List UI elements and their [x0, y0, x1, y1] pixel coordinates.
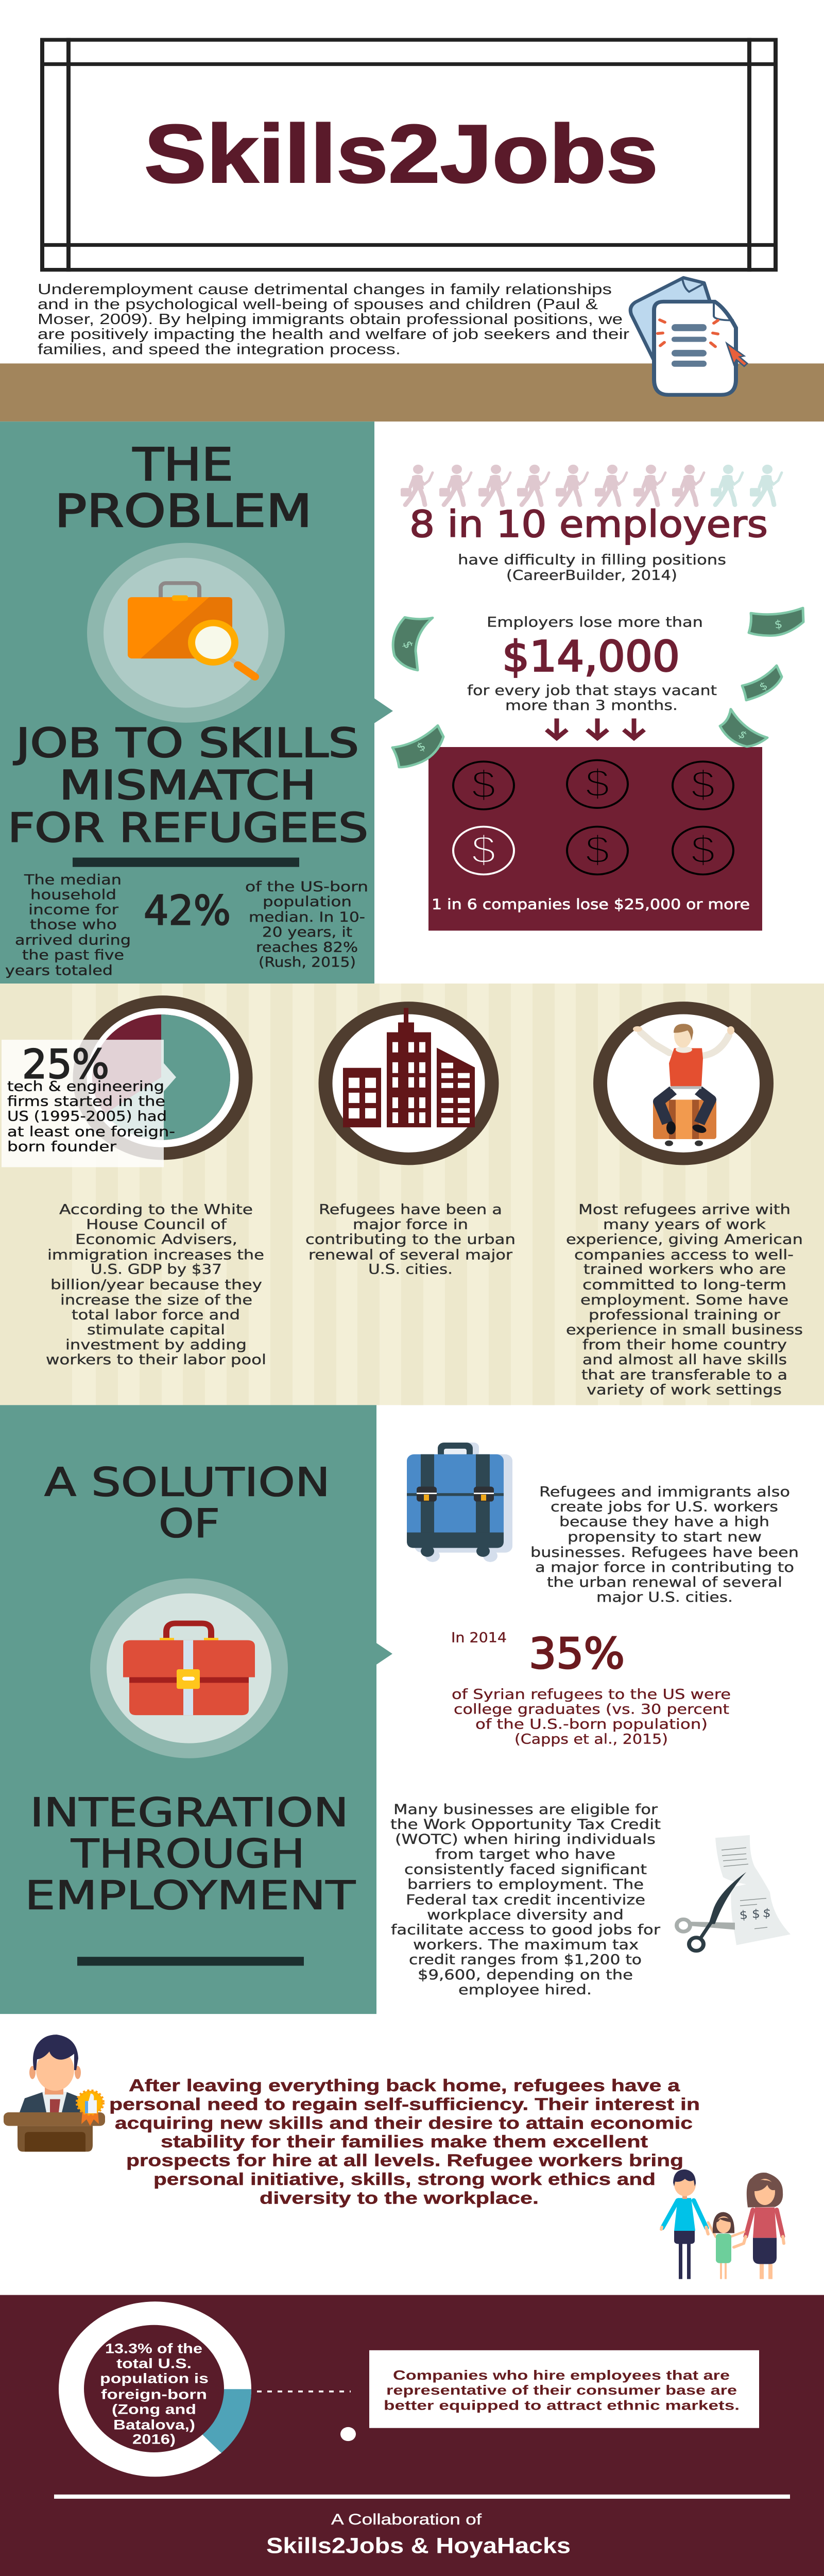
text: work opportunity tax credit: from target who have — [435, 1846, 615, 1862]
callout: ethnic markets: representative of their consumer base are — [386, 2383, 737, 2398]
text: a collaboration of: A Collaboration of — [331, 2510, 482, 2528]
text: syrian refugees — [452, 1686, 731, 1747]
text: self-sufficiency message: stability for their families make them excellent — [161, 2132, 648, 2151]
text: difficulty filling positions — [458, 552, 726, 583]
text: median income right — [245, 878, 368, 970]
callout: ethnic markets — [369, 2350, 759, 2428]
heading: the problem: THE — [132, 438, 233, 491]
heading: job to skills mismatch: JOB TO SKILLS — [13, 721, 359, 767]
icon: flying money bills — [392, 608, 803, 767]
dollar signs: $ — [586, 761, 609, 805]
text: white house council: total labor force and — [72, 1307, 240, 1323]
chart: 25% pie — [80, 1002, 246, 1154]
icon: dollar coins — [453, 760, 733, 874]
text: median income left: the past five — [22, 947, 124, 963]
text: create jobs: create jobs for U.S. workers — [551, 1499, 778, 1515]
divider bar — [77, 1957, 304, 1965]
text: foreign-born stat — [100, 2341, 209, 2447]
icon: man at podium with award badge — [4, 2035, 105, 2151]
receipt dollar signs: $ — [762, 1906, 771, 1920]
text: refugee experience: trained workers who are — [583, 1261, 786, 1277]
text: urban renewal: U.S. cities. — [368, 1261, 453, 1277]
text: work opportunity tax credit: facilitate access to good jobs for — [391, 1922, 661, 1938]
icon: three down arrows — [546, 719, 644, 738]
icon: blue suitcase — [407, 1443, 512, 1562]
stat: $14,000: $14,000 — [502, 633, 680, 682]
text: white house council: increase the size of the — [60, 1292, 252, 1308]
text: syrian refugees: of the U.S.-born population) — [475, 1716, 708, 1732]
text: self-sufficiency message: diversity to the workplace. — [260, 2189, 539, 2208]
intro text — [38, 281, 629, 358]
panel: 1 in 6 companies — [428, 747, 762, 930]
text: in 2014: In 2014 — [451, 1630, 507, 1646]
text: refugee experience: and almost all have skills — [582, 1351, 787, 1368]
text: create jobs — [530, 1484, 799, 1605]
text: white house council: Economic Advisers, — [75, 1231, 237, 1247]
text: create jobs: Refugees and immigrants also — [539, 1484, 790, 1500]
panel: a solution — [0, 1405, 392, 2014]
text: median income right: (Rush, 2015) — [259, 954, 356, 970]
heading: integration through employment: THROUGH — [71, 1831, 305, 1877]
text: white house council: billion/year because they — [50, 1277, 262, 1293]
text: create jobs: because they have a high — [559, 1514, 769, 1530]
icon: documents with cursor — [630, 278, 747, 395]
heading: job to skills mismatch — [8, 721, 368, 852]
text: foreign-born stat: total U.S. — [116, 2356, 192, 2371]
footer divider — [54, 2495, 790, 2499]
dotted connector — [257, 2391, 351, 2393]
text: every vacant job — [467, 682, 717, 714]
text: median income left: income for — [28, 902, 119, 918]
text: median income right: reaches 82% — [256, 939, 358, 955]
dollar signs — [472, 761, 715, 872]
text: median income right: median. In 10- — [249, 909, 365, 925]
heading: integration through employment: INTEGRATION — [30, 1789, 349, 1836]
intro text: families, and speed the integration process. — [38, 341, 401, 358]
text: foreign-born stat: 13.3% of the — [105, 2341, 202, 2357]
heading: the problem: PROBLEM — [55, 485, 312, 537]
text: work opportunity tax credit: workers. The maximum tax — [413, 1937, 639, 1953]
heading: integration through employment: EMPLOYMENT — [25, 1872, 356, 1919]
bill dollar signs: $ — [415, 740, 428, 754]
text: median income left: household — [30, 887, 116, 903]
heading: integration through employment — [25, 1789, 356, 1919]
text: refugee experience: Most refugees arrive with — [578, 1201, 791, 1217]
text: work opportunity tax credit: $9,600, depending on the — [418, 1967, 633, 1982]
text: refugee experience: professional training or — [589, 1307, 781, 1323]
text: refugee experience: many years of work — [603, 1216, 766, 1232]
panel: cream section — [0, 984, 824, 1405]
icon: red toolbox briefcase — [90, 1579, 288, 1758]
text: foreign-born stat: foreign-born — [101, 2387, 207, 2402]
dollar signs: $ — [472, 763, 495, 807]
chart: 13.3% donut — [59, 2301, 251, 2477]
icon: person sitting on suitcase in ring — [600, 1008, 766, 1159]
text: median income left — [5, 872, 131, 978]
text: white house council: According to the White — [59, 1201, 253, 1217]
text: create jobs: propensity to start new — [568, 1529, 762, 1545]
heading: a solution of: OF — [159, 1500, 220, 1547]
connector dot — [340, 2427, 356, 2441]
bill dollar signs: $ — [736, 728, 750, 741]
text: refugee experience: that are transferable to a — [581, 1367, 787, 1383]
text: create jobs: a major force in contributing to — [535, 1559, 794, 1575]
text: self-sufficiency message: acquiring new skills and their desire to attain economic — [115, 2113, 693, 2132]
woman — [734, 2173, 784, 2279]
text: refugee experience: experience, giving American — [566, 1231, 803, 1247]
text: white house council: House Council of — [86, 1216, 227, 1232]
text: median income left: The median — [24, 872, 122, 888]
panel: footer — [0, 2295, 824, 2576]
text: self-sufficiency message: personal initiative, skills, strong work ethics and — [153, 2170, 656, 2189]
text: white house council: immigration increases the — [47, 1247, 264, 1263]
text: employers lose more than: Employers lose more than — [487, 614, 703, 630]
callout: 25% overlay — [2, 1040, 176, 1167]
text: median income right: population — [263, 893, 352, 910]
man — [661, 2170, 708, 2279]
stat: 42%: 42% — [144, 888, 231, 935]
text: syrian refugees: college graduates (vs. 30 percent — [454, 1701, 729, 1717]
stat: 25%: 25% — [22, 1042, 109, 1088]
text: difficulty filling positions: have difficulty in filling positions — [458, 552, 726, 568]
heading: the problem — [55, 438, 312, 537]
text: difficulty filling positions: (CareerBuilder, 2014) — [506, 567, 677, 583]
text: foreign-born stat: 2016) — [132, 2432, 176, 2447]
text: urban renewal: contributing to the urban — [305, 1231, 516, 1247]
bill dollar signs — [400, 618, 783, 754]
child — [708, 2212, 744, 2279]
callout: ethnic markets: better equipped to attract ethnic markets. — [384, 2398, 740, 2413]
dollar signs: $ — [691, 763, 715, 807]
heading: job to skills mismatch: FOR REFUGEES — [8, 805, 368, 852]
text: self-sufficiency message: After leaving everything back home, refugees have a — [129, 2076, 680, 2095]
text: founders: born founder — [7, 1139, 117, 1155]
text: median income right: of the US-born — [245, 878, 368, 895]
text: urban renewal: renewal of several major — [308, 1247, 513, 1263]
text: urban renewal — [305, 1201, 516, 1277]
text: create jobs: businesses. Refugees have been — [530, 1544, 799, 1560]
text: work opportunity tax credit — [390, 1801, 661, 1998]
text: founders — [7, 1078, 175, 1155]
title: Skills2Jobs — [144, 108, 658, 200]
text: urban renewal: Refugees have been a — [319, 1201, 502, 1217]
text: refugee experience: variety of work settings — [587, 1382, 782, 1398]
text: self-sufficiency message — [109, 2076, 700, 2208]
text: refugee experience: employment. Some have — [580, 1292, 788, 1308]
text: founders: tech & engineering — [7, 1078, 164, 1094]
icon: family of three — [661, 2170, 784, 2279]
heading: job to skills mismatch: MISMATCH — [59, 763, 316, 809]
stat: 8 in 10 employers: 8 in 10 employers — [409, 503, 768, 546]
text: founders: US (1995-2005) had — [7, 1108, 167, 1124]
intro text: Moser, 2009). By helping immigrants obtain professional positions, we — [38, 311, 623, 328]
text: every vacant job: more than 3 months. — [505, 697, 678, 714]
bill dollar signs: $ — [400, 639, 416, 650]
text: self-sufficiency message: personal need to regain self-sufficiency. Their interest in — [109, 2095, 700, 2114]
text: foreign-born stat: (Zong and — [112, 2402, 196, 2417]
text: foreign-born stat: Batalova,) — [113, 2417, 195, 2433]
divider bar — [73, 858, 299, 867]
text: work opportunity tax credit: the Work Opportunity Tax Credit — [390, 1816, 661, 1833]
text: work opportunity tax credit: (WOTC) when hiring individuals — [395, 1831, 656, 1848]
icon: briefcase with magnifier — [87, 543, 285, 723]
bill dollar signs: $ — [774, 618, 783, 632]
panel: the problem — [0, 421, 393, 984]
heading: a solution of: A SOLUTION — [44, 1459, 330, 1505]
title frame — [40, 38, 778, 272]
text: work opportunity tax credit: employee hired. — [458, 1981, 592, 1998]
intro text: are positively impacting the health and welfare of job seekers and their — [38, 326, 629, 343]
text: median income right: 20 years, it — [262, 924, 352, 940]
bill dollar signs: $ — [757, 679, 770, 693]
text: work opportunity tax credit: Federal tax credit incentivize — [406, 1892, 645, 1908]
receipt dollar signs: $ — [739, 1908, 748, 1922]
text: median income left: those who — [30, 917, 117, 933]
text: white house council: stimulate capital — [87, 1321, 225, 1338]
text: refugee experience: committed to long-term — [582, 1277, 786, 1293]
text: refugee experience: experience in small business — [566, 1321, 803, 1338]
text: syrian refugees: (Capps et al., 2015) — [514, 1731, 668, 1747]
tan band — [0, 363, 824, 421]
dollar signs: $ — [691, 828, 715, 872]
text: median income left: arrived during — [15, 932, 131, 948]
text: work opportunity tax credit: credit ranges from $1,200 to — [409, 1952, 642, 1968]
text: every vacant job: for every job that stays vacant — [467, 682, 717, 699]
text: work opportunity tax credit: barriers to employment. The — [407, 1876, 644, 1892]
text: urban renewal: major force in — [353, 1216, 468, 1232]
heading: a solution of — [44, 1459, 330, 1547]
text: skills2jobs and hoyahacks: Skills2Jobs & HoyaHacks — [266, 2533, 571, 2558]
text: refugee experience: companies access to well- — [574, 1247, 794, 1263]
text: refugee experience: from their home country — [582, 1336, 787, 1353]
intro text: Underemployment cause detrimental changes in family relationships — [38, 281, 612, 298]
text: work opportunity tax credit: consistently faced significant — [404, 1861, 647, 1877]
receipt dollar signs: $ — [752, 1907, 760, 1921]
text: create jobs: the urban renewal of several — [547, 1574, 782, 1590]
receipt dollar signs — [739, 1906, 771, 1922]
text: white house council: workers to their labor pool — [46, 1351, 266, 1368]
text: refugee experience — [566, 1201, 803, 1398]
text: founders: firms started in the — [7, 1093, 165, 1109]
callout: ethnic markets: Companies who hire employees that are — [393, 2368, 730, 2383]
text: foreign-born stat: population is — [100, 2371, 209, 2386]
dollar signs: $ — [586, 828, 609, 872]
text: create jobs: major U.S. cities. — [596, 1589, 733, 1605]
text: work opportunity tax credit: Many businesses are eligible for — [393, 1801, 658, 1818]
text: white house council: U.S. GDP by $37 — [91, 1261, 222, 1277]
text: founders: at least one foreign- — [7, 1124, 175, 1140]
icon: scissors cutting receipt — [677, 1835, 791, 1951]
text: self-sufficiency message: prospects for hire at all levels. Refugee workers bring — [126, 2151, 683, 2170]
icon: city buildings in ring — [325, 1008, 492, 1159]
dollar signs: $ — [472, 828, 495, 872]
text: work opportunity tax credit: workplace diversity and — [427, 1907, 624, 1923]
intro text: and in the psychological well-being of spouses and children (Paul & — [38, 296, 598, 313]
text: median income left: years totaled — [5, 962, 113, 978]
text: syrian refugees: of Syrian refugees to the US were — [452, 1686, 731, 1702]
text: white house council — [46, 1201, 266, 1368]
caption: 1 in 6 companies: 1 in 6 companies lose $25,000 or more — [432, 896, 750, 912]
text: white house council: investment by adding — [65, 1336, 247, 1353]
stat: 35%: 35% — [529, 1630, 625, 1679]
